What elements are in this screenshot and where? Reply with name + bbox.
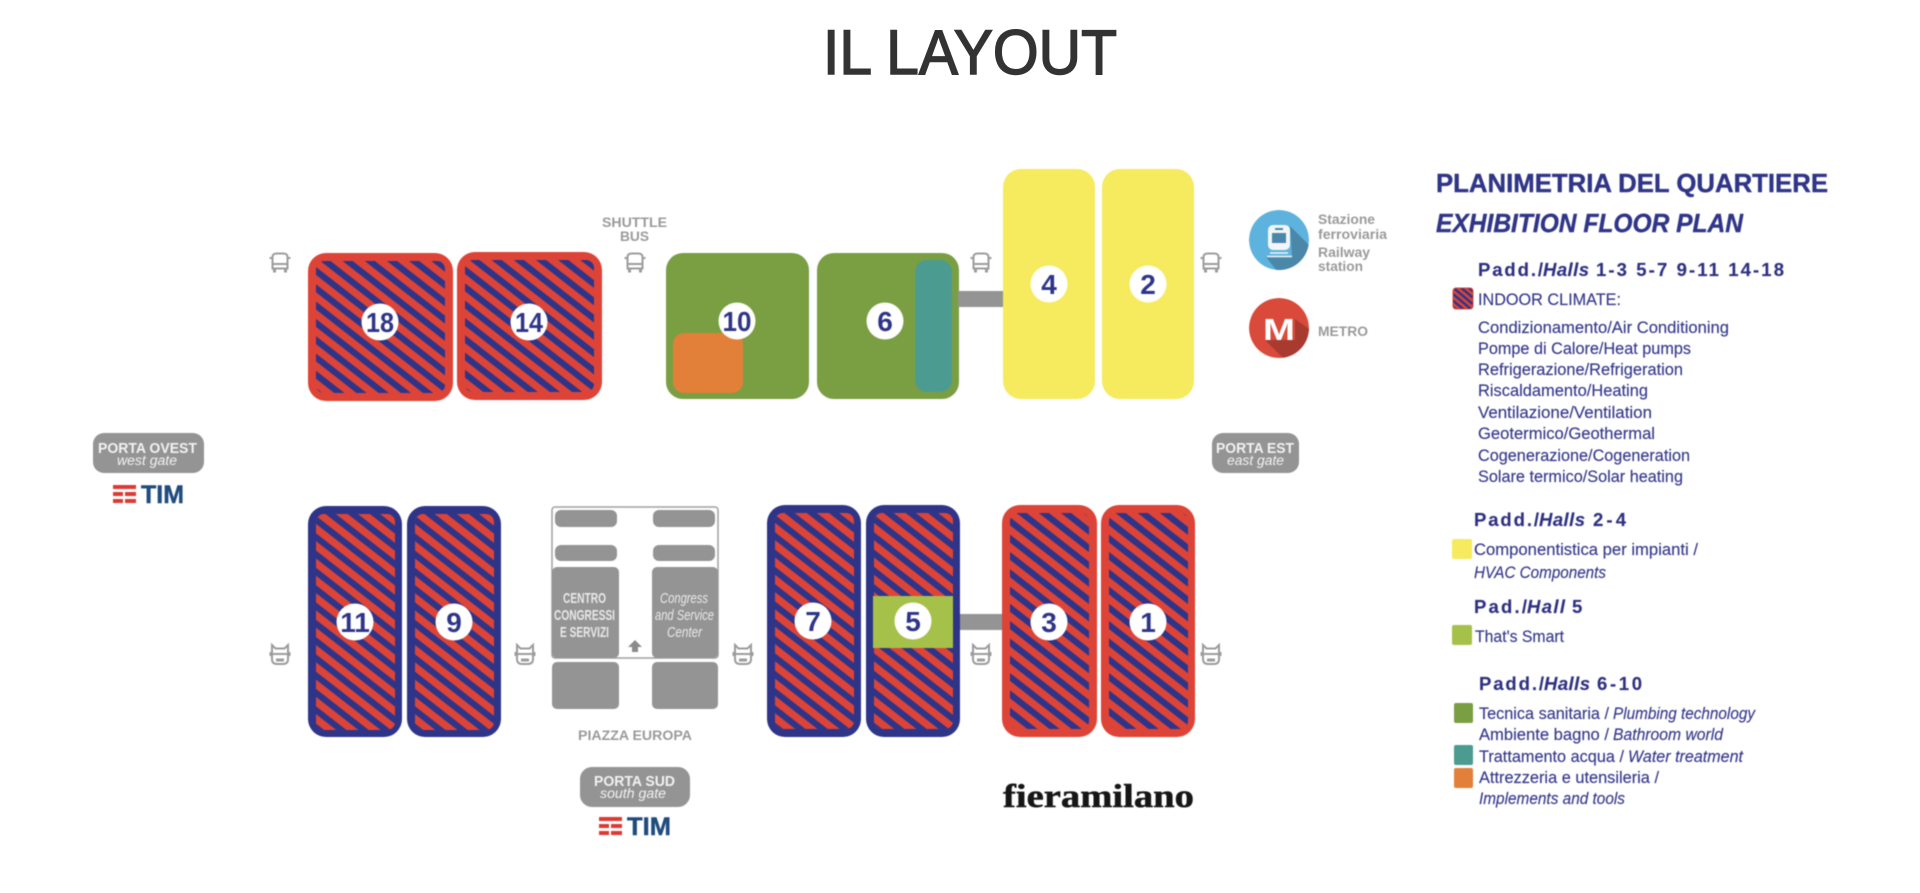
congress centre: Center: [667, 624, 703, 641]
legend group: halls 6-10: Ambiente bagno /: [1479, 726, 1609, 744]
shuttle bus label: SHUTTLE: [602, 215, 667, 230]
bus icon: [1202, 254, 1220, 272]
icon: metro: [1248, 297, 1310, 359]
icon: metro: M: [1263, 312, 1295, 347]
icon: railway station: [1248, 209, 1310, 271]
hall 11: 11: [340, 607, 370, 638]
connector: [958, 291, 1004, 307]
congress centre: Congress: [660, 590, 708, 607]
legend group: halls 6-10: Trattamento acqua /: [1479, 748, 1624, 766]
legend group: indoor climate: 1-3 5-7 9-11 14-18: [1596, 259, 1784, 280]
hall 18: 18: [366, 307, 394, 338]
legend group: halls 6-10: Plumbing technology: [1613, 705, 1757, 723]
congress centre: [552, 507, 718, 709]
west gate: PORTA OVEST: [98, 441, 197, 457]
hall 4: 4: [1041, 269, 1057, 300]
legend group: halls 2-4: 2-4: [1593, 509, 1627, 530]
legend group: indoor climate: Condizionamento/Air Conditioning: [1478, 319, 1729, 337]
label: Piazza Europa: PIAZZA EUROPA: [578, 728, 692, 743]
legend group: indoor climate: Padd./: [1478, 259, 1543, 280]
legend group: indoor climate: Pompe di Calore/Heat pumps: [1478, 340, 1691, 358]
legend group: hall 5: Hall: [1527, 596, 1566, 617]
legend heading: [1436, 168, 1828, 238]
south gate: [580, 767, 690, 807]
legend group: indoor climate: Halls: [1543, 259, 1589, 280]
shuttle bus label: BUS: [620, 229, 649, 244]
legend group: halls 6-10: Water treatment: [1628, 748, 1744, 766]
hall 6: [817, 253, 959, 399]
legend group: indoor climate: Solare termico/Solar heating: [1478, 468, 1683, 486]
bus icon: [270, 645, 290, 664]
legend group: halls 2-4: Padd./: [1474, 509, 1539, 530]
label: railway station: ferroviaria: [1318, 227, 1388, 242]
legend group: indoor climate: Riscaldamento/Heating: [1478, 382, 1648, 400]
bus icon: [972, 254, 990, 272]
legend group: hall 5: 5: [1572, 596, 1582, 617]
legend group: halls 2-4: Componentistica per impianti /: [1474, 541, 1698, 559]
hall 9: [406, 505, 502, 738]
legend group: indoor climate: [1453, 259, 1784, 486]
legend group: halls 6-10: Tecnica sanitaria /: [1479, 705, 1609, 723]
congress centre: CONGRESSI: [554, 607, 615, 624]
label: railway station: Railway: [1318, 245, 1371, 260]
hall 5: [865, 504, 961, 738]
bus icon: [516, 645, 534, 664]
congress centre: CENTRO: [563, 590, 606, 607]
bus icon: [972, 645, 990, 664]
logo: TIM south: [599, 813, 671, 841]
bus icon: [270, 254, 290, 272]
west gate: west gate: [117, 453, 177, 468]
label: railway station: station: [1318, 259, 1363, 274]
legend: [1436, 168, 1828, 808]
shuttle bus label: [602, 215, 667, 244]
hall 10: 10: [722, 306, 752, 337]
hall 14: [456, 251, 603, 401]
hall 2: [1102, 169, 1194, 399]
hall 7: [766, 504, 862, 738]
logo: TIM south: TIM: [627, 813, 671, 841]
label: railway station: [1318, 212, 1388, 274]
legend group: hall 5: Pad./: [1474, 596, 1527, 617]
legend group: indoor climate: Refrigerazione/Refrigeration: [1478, 361, 1683, 379]
hall 1: 1: [1140, 607, 1156, 638]
bus icon: [1202, 645, 1220, 664]
congress centre: E SERVIZI: [560, 624, 609, 641]
hall 9: 9: [446, 607, 462, 638]
legend group: hall 5: [1452, 596, 1582, 646]
legend group: halls 2-4: [1452, 509, 1698, 582]
legend group: halls 2-4: Halls: [1539, 509, 1585, 530]
hall 18: [307, 252, 454, 402]
logo: fieramilano: fieramilano: [1003, 779, 1194, 815]
title: IL LAYOUT: [823, 18, 1117, 88]
legend group: halls 6-10: Implements and tools: [1479, 790, 1625, 808]
east gate: [1212, 433, 1299, 473]
hall 7: 7: [805, 606, 821, 637]
legend group: halls 2-4: HVAC Components: [1474, 564, 1606, 582]
legend group: indoor climate: INDOOR CLIMATE:: [1478, 291, 1621, 309]
hall 1: [1100, 504, 1196, 738]
hall 10: [666, 253, 809, 399]
bus icon: [734, 645, 752, 664]
logo: TIM west: [113, 481, 184, 509]
label: metro: METRO: [1318, 324, 1368, 339]
legend group: halls 6-10: 6-10: [1597, 673, 1642, 694]
east gate: east gate: [1227, 453, 1284, 468]
hall 6: 6: [877, 306, 893, 337]
hall 4: [1003, 169, 1095, 399]
west gate: [93, 433, 204, 473]
south gate: south gate: [600, 786, 666, 801]
legend heading: EXHIBITION FLOOR PLAN: [1436, 208, 1744, 238]
map: exhibition floor plan: [92, 168, 1388, 836]
hall 11: [307, 505, 403, 738]
logo: TIM west: TIM: [141, 481, 184, 509]
legend group: halls 6-10: Bathroom world: [1613, 726, 1724, 744]
legend group: halls 6-10: [1454, 673, 1757, 808]
legend group: indoor climate: Cogenerazione/Cogeneration: [1478, 447, 1690, 465]
label: railway station: Stazione: [1318, 212, 1375, 227]
legend group: indoor climate: Geotermico/Geothermal: [1478, 425, 1655, 443]
hall 3: [1001, 504, 1098, 738]
hall 14: 14: [515, 307, 543, 338]
east gate: PORTA EST: [1216, 441, 1294, 457]
legend group: hall 5: That's Smart: [1475, 628, 1564, 646]
congress centre: and Service: [655, 607, 714, 624]
connector: [960, 614, 1003, 630]
south gate: PORTA SUD: [594, 774, 675, 790]
hall 3: 3: [1041, 607, 1057, 638]
hall 5: 5: [905, 606, 921, 637]
legend group: halls 6-10: Attrezzeria e utensileria /: [1479, 769, 1659, 787]
hall 2: 2: [1140, 269, 1156, 300]
legend group: halls 6-10: Halls: [1544, 673, 1590, 694]
legend group: halls 6-10: Padd./: [1479, 673, 1544, 694]
legend group: indoor climate: Ventilazione/Ventilation: [1478, 404, 1652, 422]
legend heading: PLANIMETRIA DEL QUARTIERE: [1436, 168, 1828, 198]
bus icon: [626, 254, 644, 272]
